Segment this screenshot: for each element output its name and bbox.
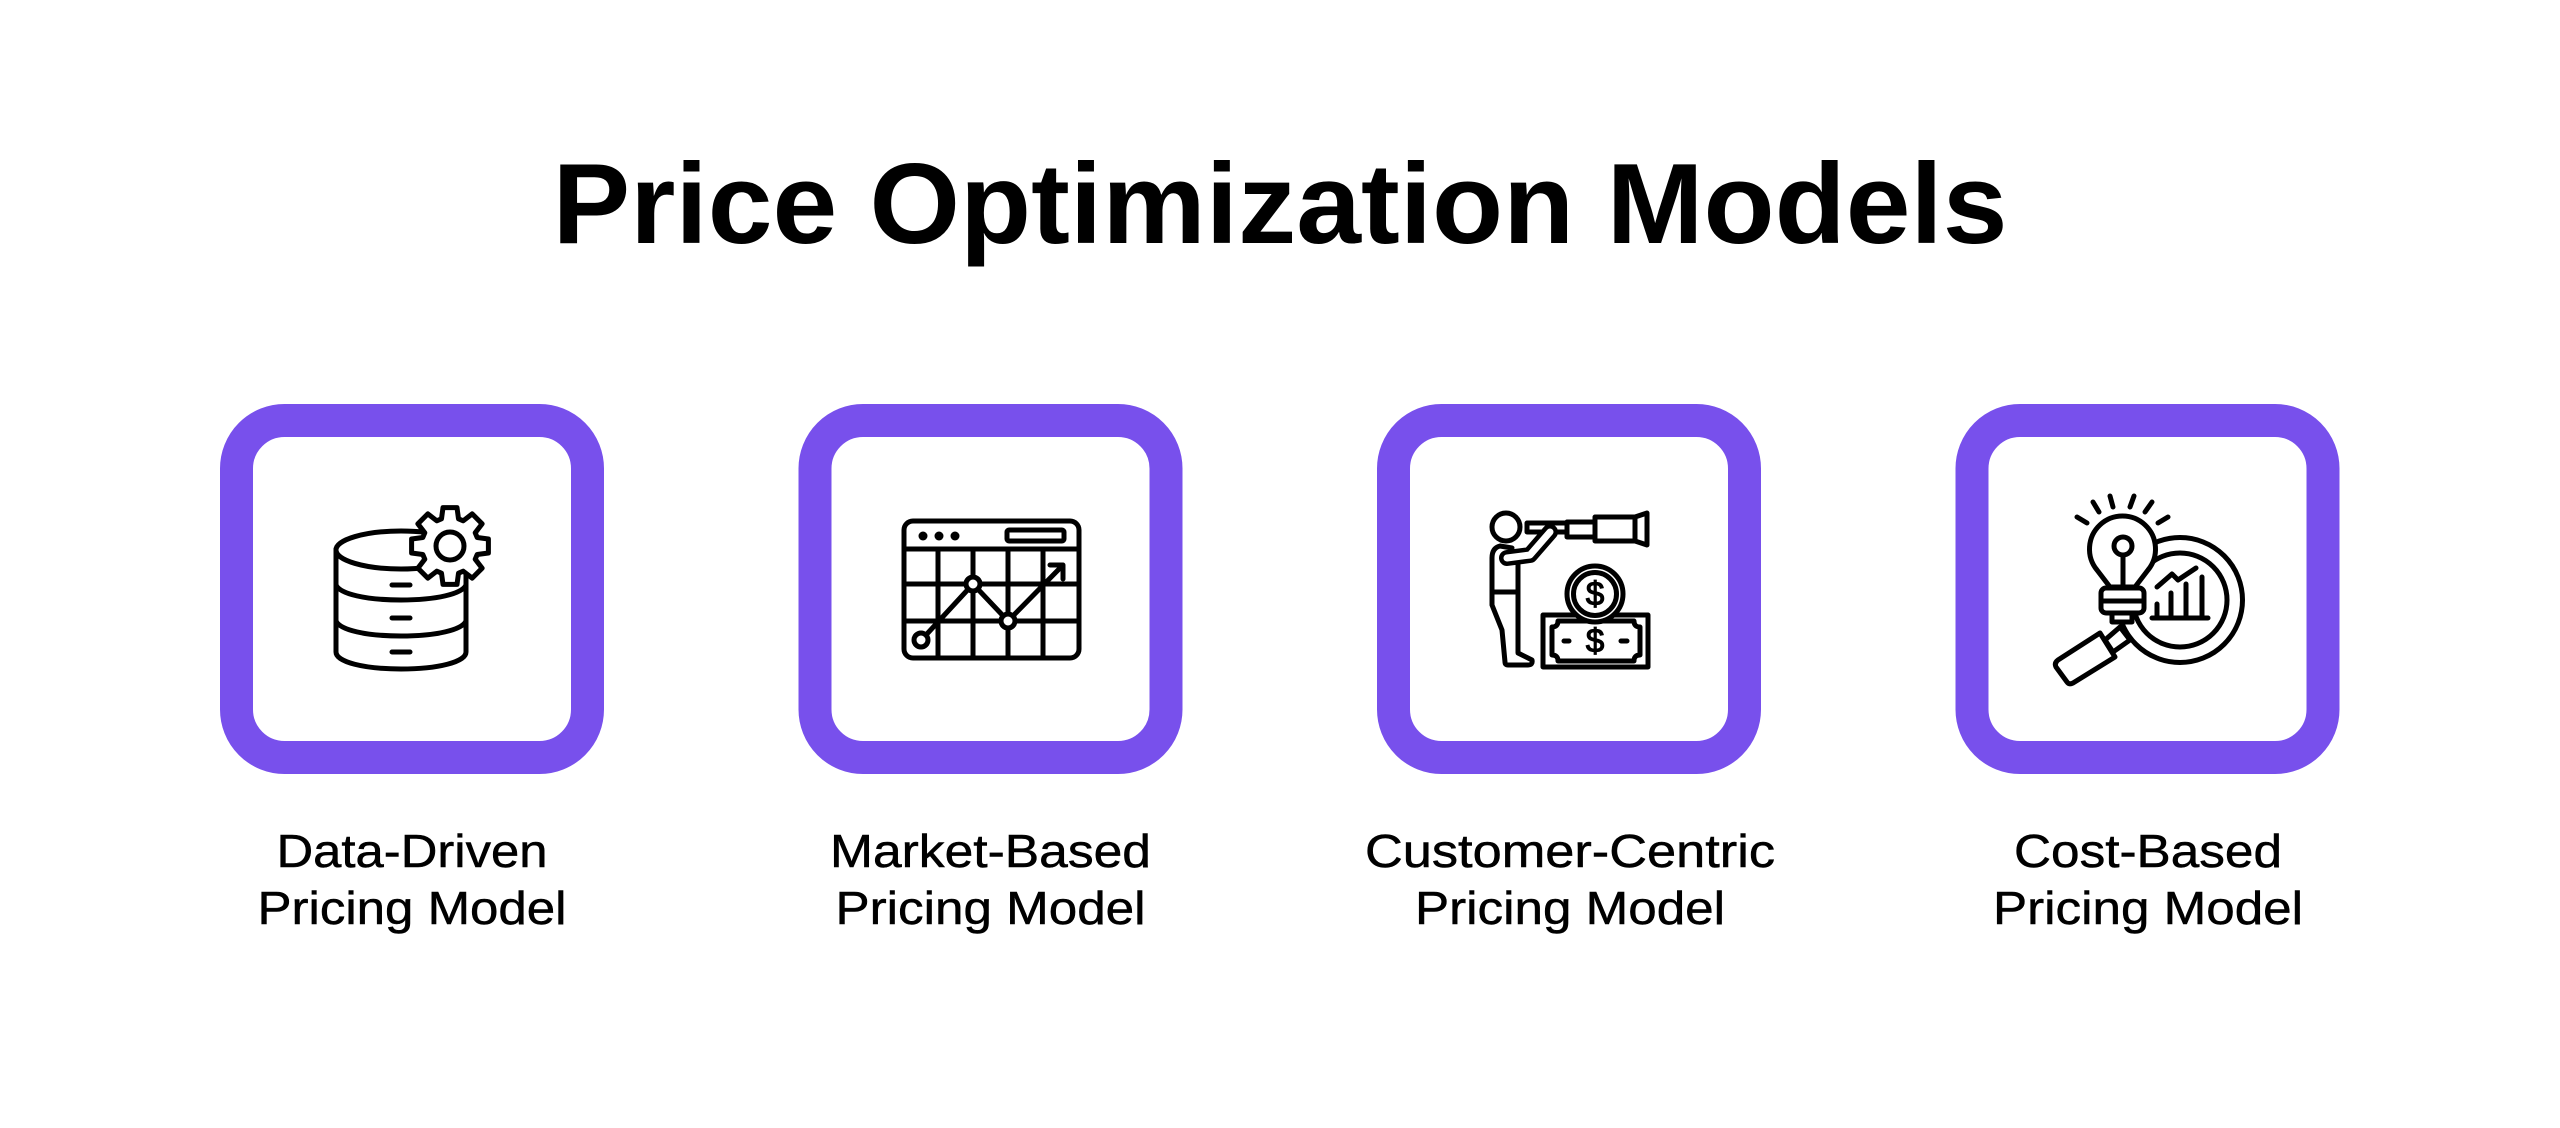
label: customer-centric pricing model: Pricing Model: [1415, 882, 1725, 934]
label: cost-based pricing model: Pricing Model: [1993, 882, 2303, 934]
icon: light bulb and magnifier with chart: [2055, 496, 2242, 684]
icon: browser grid with rising chart: [904, 521, 1079, 658]
label: cost-based pricing model: [1993, 825, 2303, 934]
card frame: cost-based: [1972, 420, 2323, 758]
panel: market-based pricing model: [815, 420, 1166, 934]
panel: data-driven pricing model: [236, 420, 588, 934]
panel: cost-based pricing model: [1972, 420, 2323, 934]
label: data-driven pricing model: [258, 825, 566, 934]
icon text: banknote dollar sign: $: [1586, 622, 1604, 659]
card frame: market-based: [815, 420, 1166, 758]
card frame: customer-centric: [1394, 420, 1744, 758]
title: Price Optimization Models: [552, 141, 2008, 268]
label: market-based pricing model: [830, 825, 1151, 934]
icon: database with gear: [336, 508, 488, 669]
label: customer-centric pricing model: [1365, 825, 1775, 934]
label: customer-centric pricing model: Customer-Centric: [1365, 825, 1775, 877]
label: market-based pricing model: Pricing Model: [836, 882, 1146, 934]
label: data-driven pricing model: Pricing Model: [258, 882, 566, 934]
icon: person with telescope and money: [1492, 513, 1648, 667]
icon text: coin dollar sign: $: [1586, 575, 1604, 612]
panel: customer-centric pricing model: [1365, 420, 1775, 934]
label: market-based pricing model: Market-Based: [830, 825, 1151, 877]
label: data-driven pricing model: Data-Driven: [276, 825, 548, 877]
label: cost-based pricing model: Cost-Based: [2014, 825, 2282, 877]
card frame: data-driven: [236, 420, 588, 758]
